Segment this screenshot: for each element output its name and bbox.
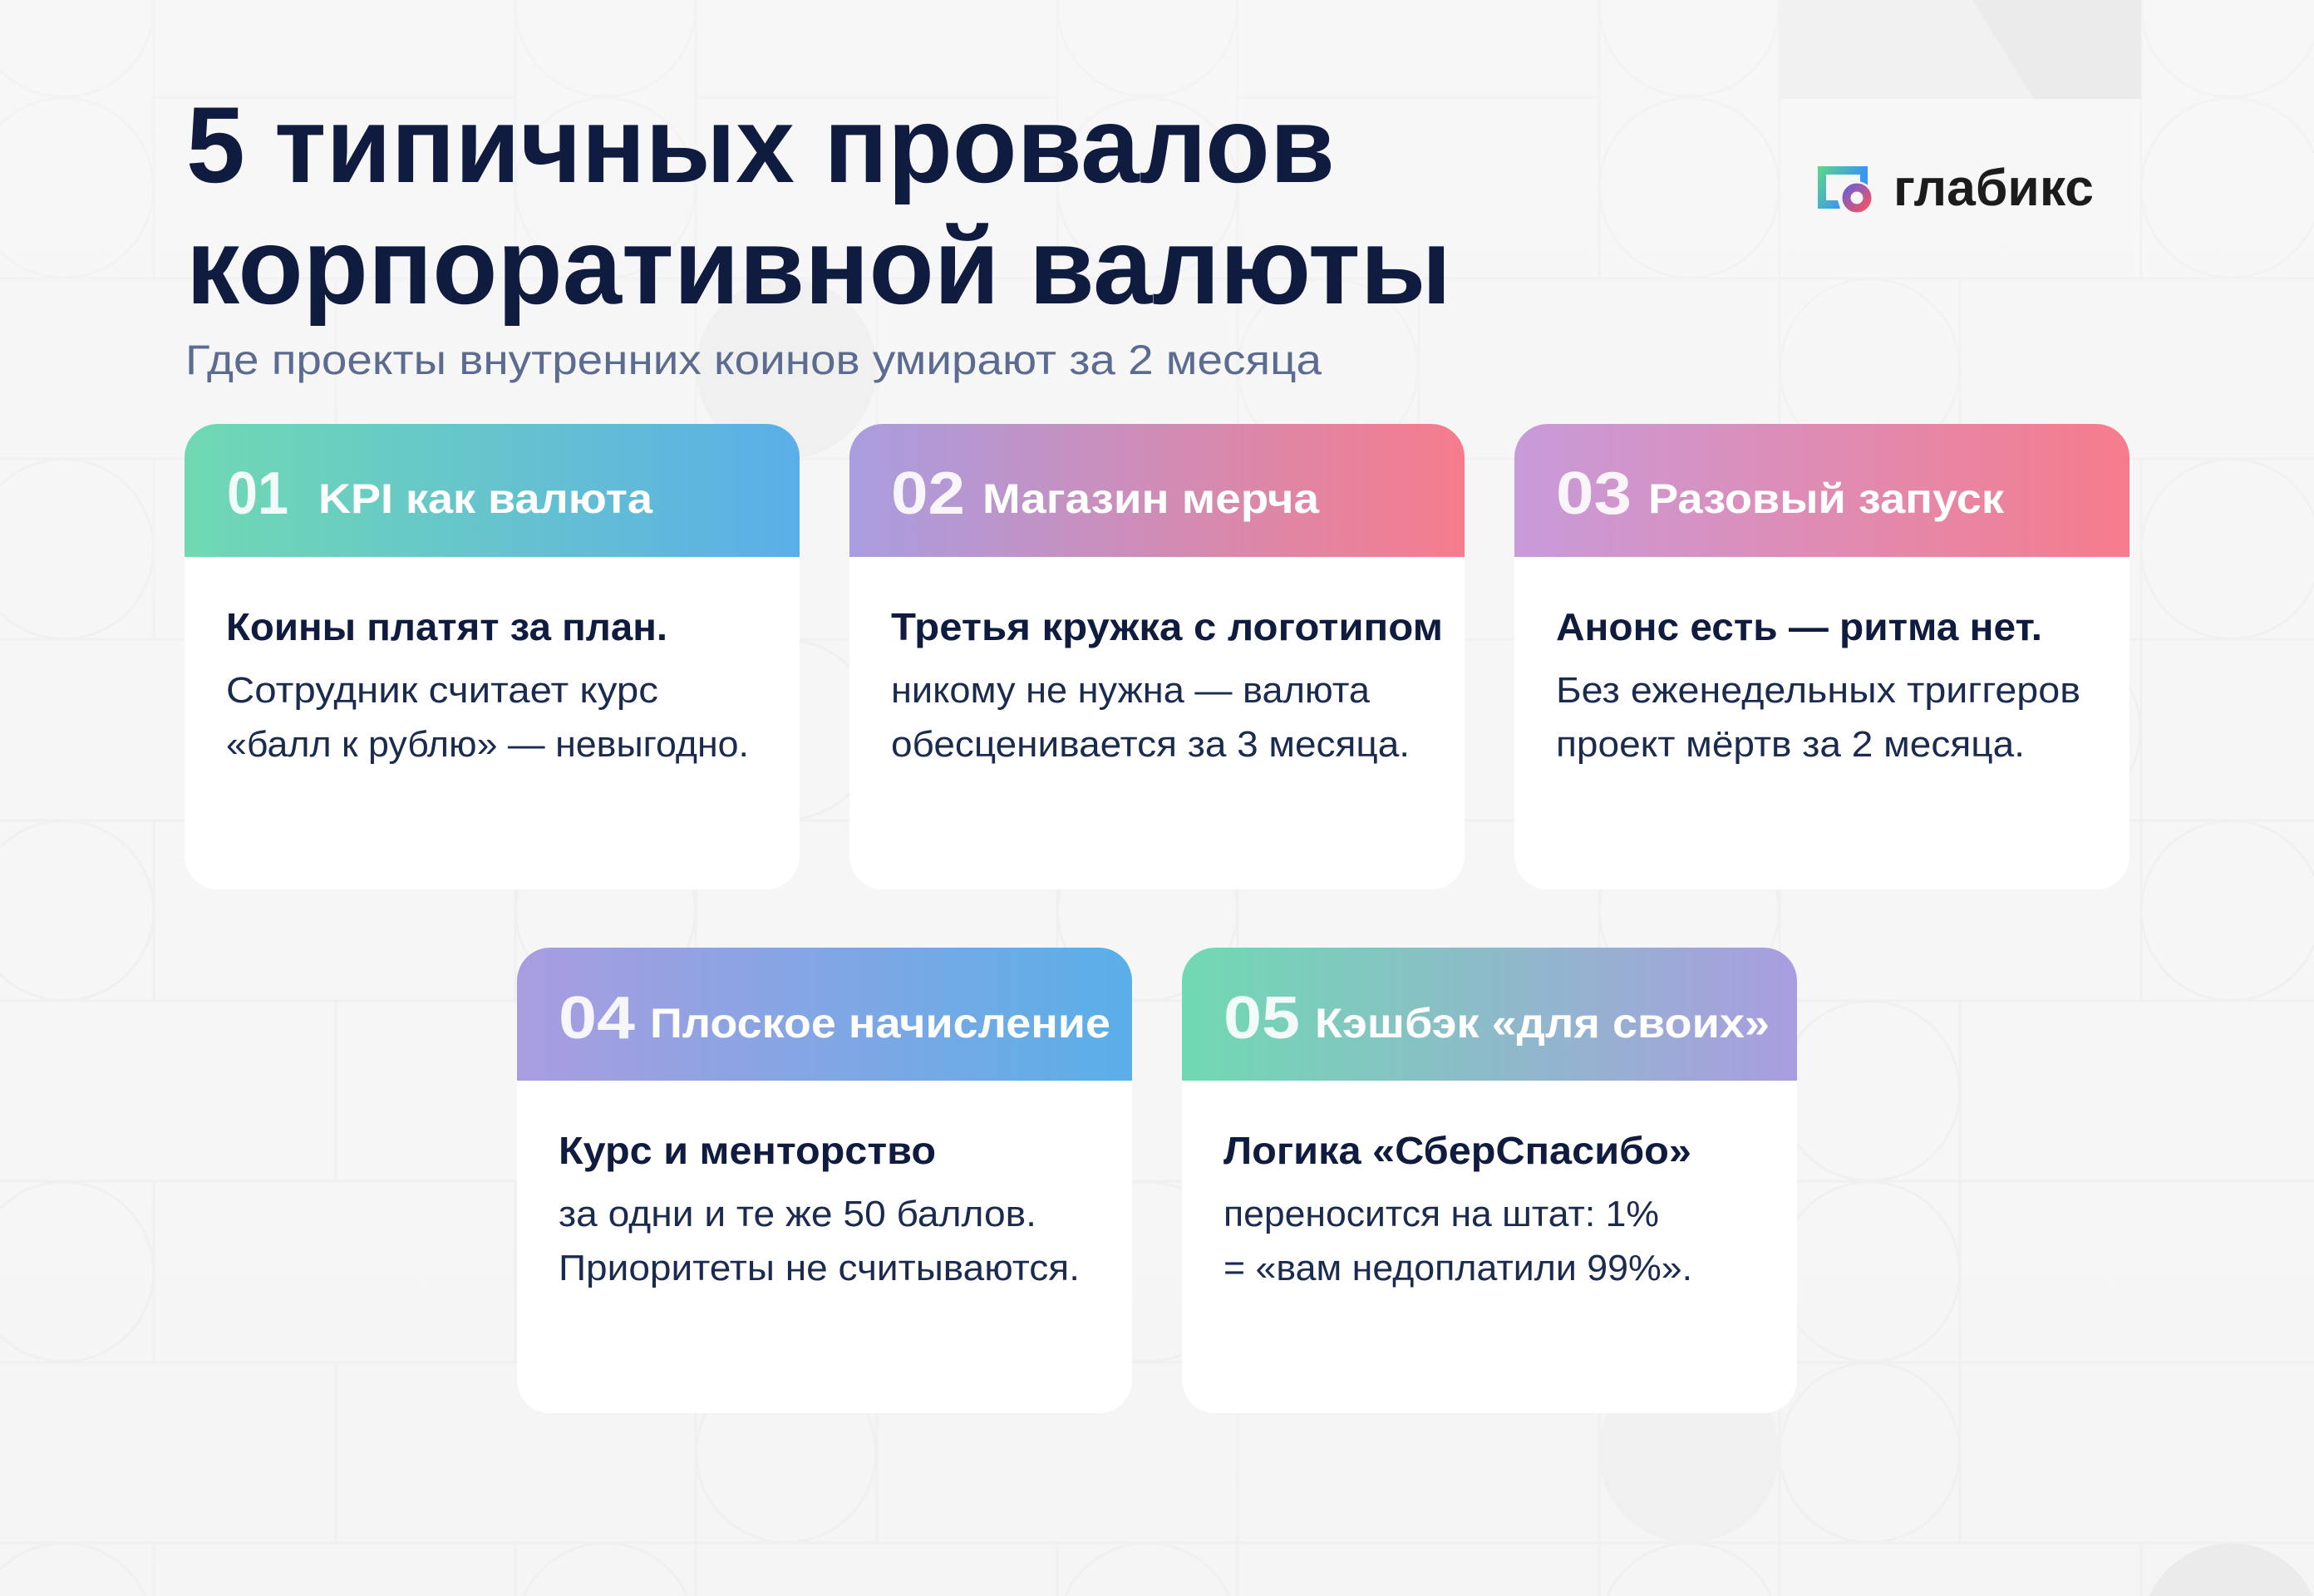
card 03 header: 03 — [1556, 461, 1632, 527]
card 01: KPI как валюта — [185, 424, 800, 889]
card 02 text: никому не нужна — валюта — [891, 670, 1371, 711]
card 02 text: Третья кружка с логотипом — [891, 605, 1443, 648]
card 03 text: Анонс есть — ритма нет. — [1556, 605, 2042, 648]
card 03 header: Разовый запуск — [1648, 475, 2005, 522]
card 03 text: проект мёртв за 2 месяца. — [1556, 724, 2025, 765]
card 04: Плоское начисление — [517, 948, 1132, 1413]
card 05 header — [1182, 948, 1797, 1081]
card 01 header: KPI как валюта — [318, 475, 653, 522]
card 05 text: переносится на штат: 1% — [1223, 1194, 1659, 1234]
card 04 text: за одни и те же 50 баллов. — [559, 1194, 1036, 1234]
card 01 text: Коины платят за план. — [226, 605, 667, 648]
card 02 text — [891, 605, 1443, 765]
card 05: Кэшбэк «для своих» — [1182, 948, 1797, 1413]
card 04 header: 04 — [559, 985, 635, 1052]
subtitle: Где проекты внутренних коинов умирают за 2 месяца — [185, 337, 1322, 383]
card 03 text — [1556, 605, 2080, 765]
icon: logo frame with ring — [1818, 166, 1873, 214]
card 05 header: 05 — [1223, 985, 1300, 1052]
card 01 text: Сотрудник считает курс — [226, 670, 658, 711]
title: корпоративной валюты — [186, 205, 1451, 327]
card 04 header: Плоское начисление — [650, 1000, 1110, 1047]
card 03: Разовый запуск — [1514, 424, 2129, 889]
logo: глабикс — [1818, 160, 2094, 217]
card 01 text — [226, 605, 749, 765]
card 02 text: обесценивается за 3 месяца. — [891, 724, 1410, 765]
card 04 text — [559, 1129, 1080, 1288]
card 03 text: Без еженедельных триггеров — [1556, 670, 2080, 711]
card 02 header: Магазин мерча — [982, 475, 1320, 522]
title — [186, 84, 1451, 327]
card 01 text: «балл к рублю» — невыгодно. — [226, 724, 749, 765]
card 05 text: = «вам недоплатили 99%». — [1223, 1248, 1692, 1288]
card 01 header — [185, 424, 800, 557]
card 02: Магазин мерча — [849, 424, 1465, 889]
card 04 text: Приоритеты не считываются. — [559, 1248, 1080, 1288]
title: 5 типичных провалов — [186, 84, 1335, 205]
card 02 header: 02 — [891, 461, 965, 527]
card 04 text: Курс и менторство — [559, 1129, 936, 1172]
logo wordmark: глабикс — [1893, 160, 2094, 217]
card 05 text — [1223, 1129, 1692, 1288]
card 04 header — [517, 948, 1132, 1081]
card 05 text: Логика «СберСпасибо» — [1223, 1129, 1691, 1172]
card 05 header: Кэшбэк «для своих» — [1315, 1000, 1770, 1047]
card 03 header — [1514, 424, 2129, 557]
card 01 header: 01 — [227, 461, 288, 527]
card 02 header — [849, 424, 1465, 557]
